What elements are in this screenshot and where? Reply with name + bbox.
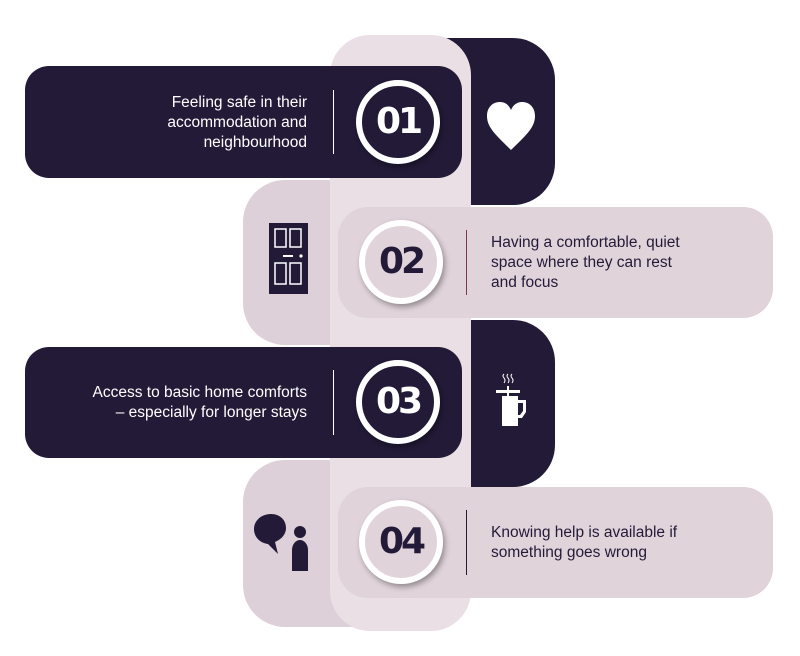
text row 3: Access to basic home comforts [92,384,307,401]
text row 3: – especially for longer stays [116,404,307,421]
text row 2: and focus [491,274,558,291]
panel: row 1 [25,66,462,178]
dark tab row 1 [440,38,555,205]
icon: heart [487,102,535,150]
number 04: 04 [379,521,423,562]
dark tab row 3 [440,320,555,487]
central pill [330,35,471,631]
number 01 [356,80,440,164]
icon: door [269,223,308,294]
number 04 [359,500,443,584]
icon: cafetiere [496,374,526,426]
text row 4: something goes wrong [491,544,647,561]
icon: speech person [254,514,308,571]
text row 2: Having a comfortable, quiet [491,234,680,251]
text row 2: space where they can rest [491,254,672,271]
number 02 [359,220,443,304]
panel: row 2 [338,207,773,318]
light tab row 2 [243,180,393,345]
text row 1: Feeling safe in their [172,94,307,111]
text row 3 [92,384,307,421]
text row 1: neighbourhood [204,134,307,151]
text row 1: accommodation and [167,114,307,131]
number 01: 01 [376,101,420,142]
number 03 [356,360,440,444]
light tab row 4 [243,460,393,627]
panel: row 4 [338,487,773,598]
text row 1 [167,94,307,151]
number 03: 03 [376,381,420,422]
text row 2 [491,234,680,291]
number 02: 02 [379,241,423,282]
text row 4 [491,524,678,561]
panel: row 3 [25,347,462,458]
text row 4: Knowing help is available if [491,524,677,541]
